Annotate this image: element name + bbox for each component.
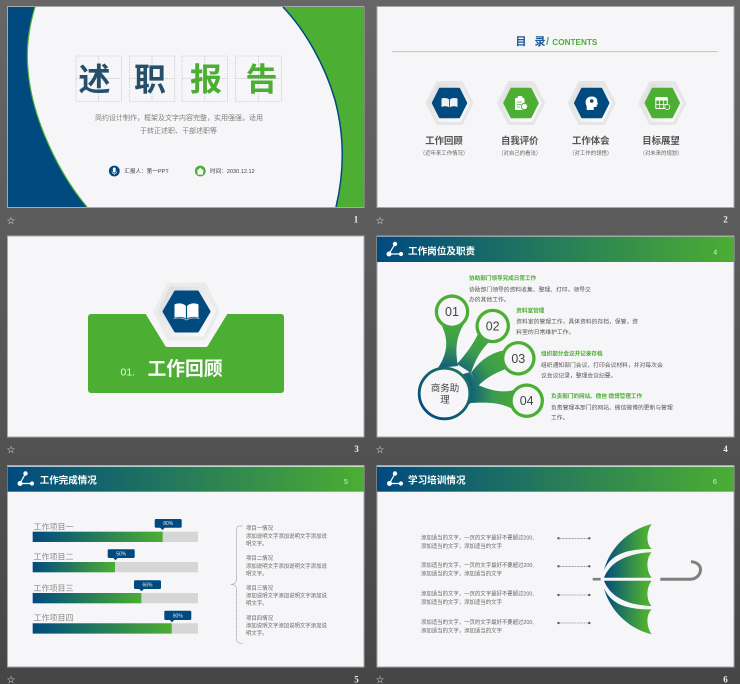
item: 工作体会 (569, 82, 614, 157)
panel: slide 4 job roles: 4 (713, 250, 717, 256)
project notes: 明文字。 (246, 599, 268, 607)
subtitle: 于转正述职、干部述职等 (140, 126, 217, 135)
item: 工作体会: （对工作的领悟） (569, 149, 612, 157)
footer: slide 6 (376, 674, 728, 684)
title (78, 62, 278, 98)
text block 4: 负责管理本部门的网站、微信微博的更新与管理 (551, 403, 673, 411)
notch hexagon (148, 283, 225, 345)
date text: 时间：2030.12.12 (210, 167, 255, 175)
panel: slide 4 job roles (377, 236, 734, 437)
heading: 目 (516, 35, 526, 48)
bar chart: 80% (163, 521, 174, 527)
panel: slide 5 work completion: 5 (344, 479, 348, 486)
section title: 工作回顾 (148, 358, 223, 379)
header title: 学习培训情况 (408, 474, 466, 486)
diagram: radial stems (435, 294, 544, 418)
brace (231, 526, 243, 643)
project notes: 项目三情况 (246, 584, 274, 592)
circle numbers: 02 (486, 320, 500, 334)
title: 报 (190, 62, 222, 98)
subtitle (95, 113, 263, 135)
icon: home (195, 166, 206, 176)
footer: slide 4: 4 (723, 444, 728, 454)
text block 3: 组织部分会议并记录存档 (541, 350, 603, 358)
text block 1: 办的其他工作。 (469, 295, 510, 303)
icon: nodes (388, 472, 403, 486)
footer: slide 1 (6, 214, 359, 227)
footer: slide 1: ☆ (6, 216, 16, 227)
centre circle: 商务助 (431, 382, 459, 394)
text block 3: 组织通知部门会议，打印会议材料，并对每次会 (541, 361, 663, 369)
text block 4 (551, 392, 673, 421)
title: 告 (245, 62, 278, 98)
footer: slide 3 (6, 444, 359, 456)
footer: slide 4 (376, 444, 728, 456)
panel: slide 1 cover (8, 6, 364, 208)
heading: / (546, 36, 549, 48)
bar chart: 66% (142, 583, 153, 589)
item: 自我评价: （对自己的看法） (498, 149, 541, 157)
text block 2: 资料室的管理工作，具体资料的存档，保管，资 (516, 318, 638, 326)
text block 1: 协助部门领导的资料收集、整理、打印，领导交 (469, 285, 591, 293)
footer: slide 2: 2 (723, 214, 728, 224)
project notes: 项目一情况 (246, 524, 274, 532)
panel: slide 2 contents (377, 6, 734, 208)
project notes: 添加说明文字添加说明文字添加说 (246, 532, 327, 540)
item: 目标展望: 目标展望 (642, 135, 680, 146)
item: 工作体会: 工作体会 (572, 135, 610, 146)
text list: 添加适当的文字，添加适当的文字 (421, 627, 502, 635)
circle numbers: 01 (445, 305, 459, 319)
text list: 添加适当的文字，一页的文字最好不要超过200, (421, 618, 534, 626)
item: 目标展望: （对未来的规划） (639, 149, 683, 157)
project notes: 明文字。 (246, 570, 268, 578)
footer: slide 3: 3 (354, 444, 359, 454)
bar chart: 工作项目四 (34, 612, 74, 622)
green banner (88, 314, 284, 393)
icon: nodes (387, 242, 403, 256)
header bar (377, 467, 734, 492)
right green curved shape (283, 7, 364, 207)
project notes: 明文字。 (246, 629, 268, 637)
text block 3 (541, 350, 663, 379)
centre circle: 理 (440, 395, 450, 406)
text block 3: 议会议记录，整理会议纪要。 (541, 371, 616, 379)
centre circle (419, 368, 470, 419)
item: 自我评价: 自我评价 (501, 135, 539, 146)
project notes: 明文字。 (246, 540, 268, 548)
project notes: 项目四情况 (246, 614, 274, 622)
panel: slide 3 section (8, 236, 364, 437)
title grid boxes (76, 56, 281, 102)
item: 自我评价 (498, 82, 544, 157)
text block 2 (516, 306, 638, 336)
section title: 01. (120, 366, 135, 378)
project notes: 项目二情况 (246, 554, 274, 562)
item: 工作回顾: 工作回顾 (425, 135, 463, 146)
panel: slide 6 training: 6 (713, 479, 717, 486)
project notes (246, 524, 327, 637)
text block 4: 工作。 (551, 413, 568, 421)
text list: 添加适当的文字，一页的文字最好不要超过200, (421, 589, 534, 597)
text list (421, 533, 534, 635)
text list: 添加适当的文字，一页的文字最好不要超过200, (421, 561, 534, 569)
text list: 添加适当的文字，添加适当的文字 (421, 542, 502, 550)
footer: slide 2: ☆ (376, 216, 384, 227)
header title: 工作完成情况 (40, 474, 97, 486)
footer: slide 5 (6, 674, 359, 684)
item: 目标展望 (639, 82, 685, 157)
item: 工作回顾: （近年来工作情况） (420, 149, 468, 157)
bar chart: 90% (173, 613, 183, 619)
text block 2: 料室的日常维护工作。 (516, 328, 574, 336)
bar chart: 50% (116, 552, 127, 558)
umbrella (593, 524, 700, 634)
circle numbers (445, 305, 534, 408)
panel: slide 6 training (377, 466, 734, 667)
bar chart: 工作项目二 (34, 552, 74, 562)
connector lines (557, 537, 590, 624)
circle numbers: 03 (511, 352, 525, 366)
icon: microphone (109, 166, 120, 176)
text block 2: 资料室管理 (516, 306, 545, 314)
subtitle: 简约设计制作，框架及文字内容完整，实用强强，适用 (95, 113, 263, 122)
heading: CONTENTS (552, 38, 598, 47)
text block 1: 协助部门领导完成日常工作 (469, 274, 537, 282)
icon: nodes (18, 472, 34, 486)
item: 工作回顾 (420, 82, 472, 157)
footer: slide 1: 1 (354, 214, 359, 224)
text list: 添加适当的文字，添加适当的文字 (421, 570, 502, 578)
heading: 录 (534, 35, 546, 48)
header bar (8, 467, 364, 492)
text block 4: 负责部门的网站、微信 微博管理工作 (551, 392, 642, 400)
header title: 工作岗位及职责 (408, 246, 476, 258)
project notes: 添加说明文字添加说明文字添加说 (246, 591, 327, 599)
tooltips (108, 519, 191, 622)
bar chart (33, 519, 198, 634)
left blue curved shape (8, 7, 87, 207)
bar chart: 工作项目一 (34, 522, 74, 532)
footer: slide 2 (376, 214, 728, 227)
footer: slide 3: ☆ (6, 445, 16, 456)
title: 述 (78, 62, 111, 98)
panel: slide 5 work completion (8, 466, 364, 667)
footer: slide 4: ☆ (376, 445, 384, 456)
icon: section hexagon with book (156, 284, 218, 338)
title: 职 (134, 62, 166, 98)
circle numbers: 04 (520, 394, 534, 408)
heading (516, 35, 598, 48)
text list: 添加适当的文字，添加适当的文字 (421, 598, 502, 606)
bar chart: 工作项目三 (34, 583, 74, 593)
project notes: 添加说明文字添加说明文字添加说 (246, 562, 327, 570)
text list: 添加适当的文字，一页的文字最好不要超过200, (421, 533, 534, 541)
reporter text: 汇报人：第一PPT (124, 167, 169, 175)
header bar (377, 237, 734, 262)
project notes: 添加说明文字添加说明文字添加说 (246, 621, 327, 629)
text block 1 (469, 274, 591, 303)
